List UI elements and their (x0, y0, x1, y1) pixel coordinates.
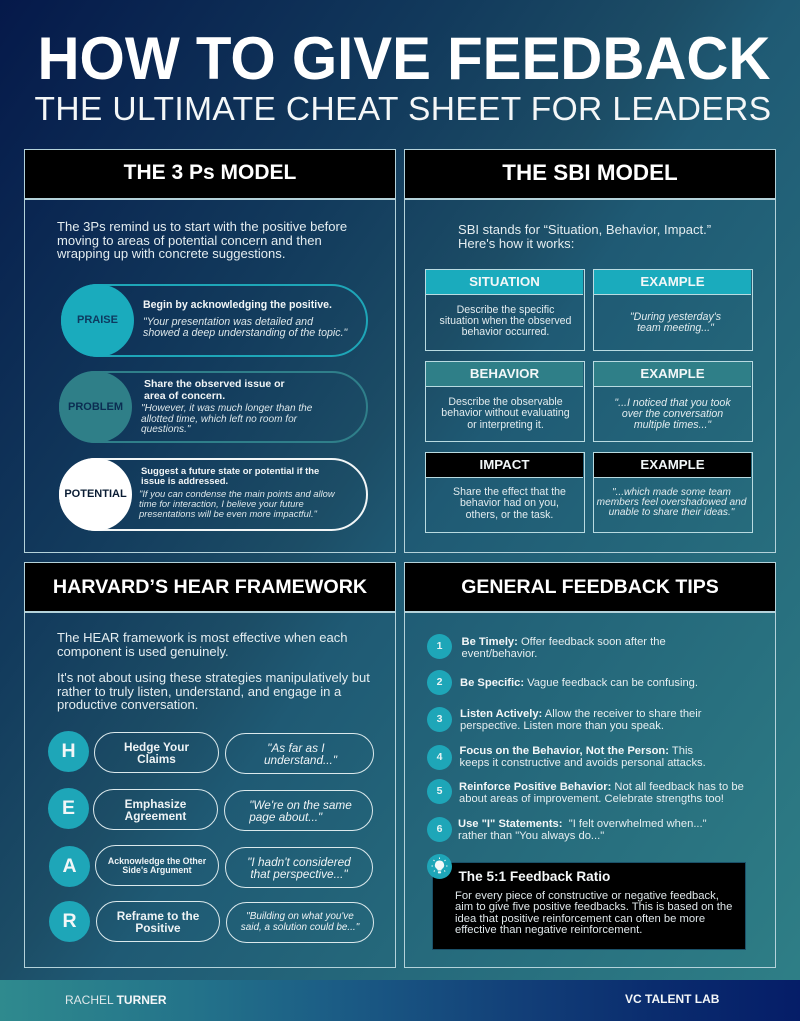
text: HEAR introduction (57, 630, 370, 712)
heading: the SBI model: THE SBI MODEL (502, 160, 678, 185)
panel: the SBI model (404, 149, 776, 553)
footer band (0, 980, 800, 1021)
card: impact: IMPACT (480, 457, 529, 472)
text: potential example (138, 488, 336, 519)
callout: the 5:1 feedback ratio (427, 854, 746, 950)
text: ratio explanation: For every piece of constructive or negative feedback, (455, 890, 719, 902)
text: problem example: "However, it was much longer than the (141, 403, 312, 414)
heading: the 3 Ps model: THE 3 Ps MODEL (124, 161, 296, 184)
number badge 1 (427, 634, 452, 659)
text: listen actively (460, 708, 702, 732)
text: focus on the behavior: Focus on the Behavior, Not the Person: This (460, 745, 693, 757)
number badge 1: 1 (437, 640, 442, 652)
label: reframe to the positive: Positive (135, 920, 181, 934)
text: reinforce positive behavior: Reinforce Positive Behavior: Not all feedback has to be (459, 781, 744, 793)
card: behavior example: EXAMPLE (640, 366, 705, 381)
row: reframe to the positive (49, 901, 374, 943)
label: emphasize agreement: Agreement (125, 808, 186, 822)
text: use I statements (458, 818, 707, 842)
heading: general feedback tips: GENERAL FEEDBACK TIPS (461, 576, 719, 598)
row: praise (61, 284, 368, 357)
quote: reframe example: said, a solution could be..." (241, 922, 359, 932)
quote: emphasize example: page about..." (249, 810, 322, 824)
tip 6 (427, 817, 707, 842)
heading: general feedback tips (404, 562, 776, 613)
text: potential example: presentations will be even more impactful." (139, 508, 317, 519)
card: impact example: EXAMPLE (640, 457, 705, 472)
text: reinforce positive behavior: about areas of improvement. Celebrate strengths too! (459, 793, 724, 805)
text: impact example: members feel overshadowed and (597, 497, 746, 508)
text: SBI introduction: Here's how it works: (458, 236, 574, 250)
heading: the 5:1 feedback ratio: The 5:1 Feedback Ratio (458, 869, 610, 884)
text: impact description: others, or the task. (466, 509, 553, 521)
badge: praise (61, 284, 134, 357)
quote: acknowledge example (225, 847, 373, 888)
text: potential guidance (141, 466, 319, 487)
text: listen actively: perspective. Listen more than you speak. (460, 720, 664, 732)
author name: RACHEL TURNER (65, 993, 167, 1007)
text: behavior description (441, 396, 570, 431)
letter badge: R: R (62, 910, 77, 932)
letter badge: H (48, 731, 89, 772)
text: ratio explanation: aim to give five positive feedbacks. This is based on the (455, 901, 732, 913)
text: behavior example: over the conversation (622, 408, 723, 420)
text: praise example (143, 316, 348, 339)
text: praise example: showed a deep understanding of the topic." (143, 327, 347, 339)
text: potential example: "If you can condense the main points and allow (139, 488, 335, 499)
label: acknowledge the argument: Side's Argument (122, 864, 192, 874)
text: 3Ps introduction: wrapping up with concrete suggestions. (57, 246, 285, 261)
text: be specific: Be Specific: Vague feedback can be confusing. (460, 677, 698, 689)
quote: reframe example (226, 902, 374, 943)
text: problem example (141, 403, 312, 435)
badge: praise: PRAISE (77, 314, 118, 326)
row: potential (59, 458, 368, 531)
tip 5 (427, 779, 744, 805)
letter badge: A: A (62, 855, 77, 877)
quote: acknowledge example: "I hadn't considered (247, 854, 351, 868)
text: behavior description: or interpreting it. (467, 419, 544, 431)
text: praise guidance: Begin by acknowledging the positive. (143, 299, 332, 311)
badge: problem: PROBLEM (68, 401, 123, 413)
quote: reframe example: "Building on what you've (246, 911, 354, 922)
text: impact example: "...which made some team (612, 486, 731, 498)
quote: hedge example (225, 733, 374, 774)
text: situation example (630, 311, 721, 334)
text: problem example: questions." (141, 424, 190, 435)
text: HEAR introduction: The HEAR framework is most effective when each (57, 630, 348, 645)
text: focus on the behavior (460, 745, 706, 769)
card: situation (425, 269, 585, 351)
text: focus on the behavior: keeps it constructive and avoids personal attacks. (460, 757, 706, 769)
text: be timely (462, 636, 666, 660)
text: HEAR introduction: productive conversation. (57, 697, 198, 712)
quote: hedge example: "As far as I (267, 740, 325, 754)
text: reinforce positive behavior (459, 781, 744, 805)
text: situation description: situation when the observed (440, 315, 571, 327)
card: situation: SITUATION (469, 274, 540, 289)
quote: acknowledge example: that perspective..." (250, 866, 348, 880)
badge: potential (59, 458, 132, 531)
letter badge: H: H (61, 740, 76, 762)
text: HEAR introduction: component is used genuinely. (57, 644, 229, 658)
text: problem guidance: Share the observed issue or (144, 378, 285, 390)
text: problem guidance: area of concern. (144, 390, 225, 402)
text: situation description (440, 304, 571, 338)
label: acknowledge the argument: Acknowledge the Other (108, 856, 206, 866)
label: emphasize agreement (93, 789, 218, 830)
row: emphasize agreement (48, 788, 373, 831)
text: potential example: time for interaction, I believe your future (139, 498, 304, 509)
text: SBI introduction (458, 222, 711, 250)
card: situation example: EXAMPLE (640, 274, 705, 289)
text: ratio explanation: idea that positive reinforcement can often be more (455, 913, 705, 925)
label: reframe to the positive (96, 901, 220, 942)
text: listen actively: Listen Actively: Allow the receiver to share their (460, 708, 701, 720)
number badge 4 (427, 745, 452, 770)
row: hedge your claims (48, 731, 374, 774)
tip 4 (427, 745, 706, 770)
text: situation description: Describe the specific (457, 304, 554, 316)
label: hedge your claims: Hedge Your (124, 740, 189, 754)
text: impact description (453, 486, 566, 521)
brand name: VC TALENT LAB (625, 992, 719, 1006)
panel: general feedback tips (404, 562, 776, 968)
number badge 6: 6 (437, 823, 442, 835)
text: behavior example: "...I noticed that you took (614, 396, 731, 408)
number badge 4: 4 (437, 751, 442, 763)
panel: the 3 Ps model (24, 149, 396, 553)
text: HEAR introduction: It's not about using these strategies manipulatively but (57, 670, 370, 685)
text: situation example: "During yesterday's (630, 311, 721, 323)
text: HEAR introduction: rather to truly listen, understand, and engage in a (57, 684, 341, 698)
tip 1 (427, 634, 666, 660)
number badge 6 (427, 817, 452, 842)
text: SBI introduction: SBI stands for “Situation, Behavior, Impact.” (458, 222, 711, 237)
label: reframe to the positive: Reframe to the (117, 908, 199, 922)
letter badge: R (49, 901, 90, 942)
card: impact example (593, 452, 753, 533)
text: impact description: behavior had on you, (460, 497, 559, 509)
badge: problem (59, 371, 132, 443)
text: use I statements: rather than "You always do..." (458, 830, 604, 842)
tip 2 (427, 670, 698, 695)
text: problem guidance (144, 378, 285, 402)
text: be timely: event/behavior. (462, 648, 537, 660)
number badge 3: 3 (437, 713, 442, 725)
heading: Harvard's HEAR framework (24, 562, 396, 613)
label: hedge your claims: Claims (137, 752, 176, 766)
panel: Harvard's HEAR framework (24, 562, 396, 968)
text: praise example: "Your presentation was detailed and (143, 316, 313, 328)
letter badge: E (48, 788, 89, 829)
text: 3Ps introduction: moving to areas of potential concern and then (57, 232, 322, 248)
letter badge: E: E (62, 797, 75, 819)
card: behavior (425, 361, 585, 442)
text: situation example: team meeting..." (637, 322, 714, 334)
row: problem (59, 371, 368, 443)
number badge 5 (427, 779, 452, 804)
card: impact (425, 452, 585, 533)
text: 3Ps introduction (57, 219, 347, 261)
text: behavior description: behavior without evaluating (441, 407, 570, 419)
number badge 2: 2 (437, 676, 442, 688)
card: behavior example (593, 361, 753, 442)
tip 3 (427, 707, 702, 732)
label: emphasize agreement: Emphasize (125, 796, 186, 810)
text: behavior example: multiple times..." (634, 419, 711, 431)
icon: light bulb (427, 854, 452, 879)
number badge 3 (427, 707, 452, 732)
text: ratio explanation (455, 890, 732, 936)
label: acknowledge the argument (95, 845, 219, 886)
text: use I statements: Use "I" Statements: "I felt overwhelmed when..." (458, 818, 707, 830)
card: behavior: BEHAVIOR (470, 366, 539, 381)
quote: emphasize example: "We're on the same (249, 798, 352, 812)
row: acknowledge the argument (49, 845, 373, 888)
number badge 2 (427, 670, 452, 695)
heading: the 3 Ps model (24, 149, 396, 200)
number badge 5: 5 (437, 785, 442, 797)
text: situation description: behavior occurred. (462, 326, 549, 338)
text: problem example: allotted time, which left no room for (141, 414, 297, 424)
heading: Harvard's HEAR framework: HARVARD’S HEAR FRAMEWORK (53, 576, 367, 598)
card: situation example (593, 269, 753, 351)
subtitle: THE ULTIMATE CHEAT SHEET FOR LEADERS (35, 91, 771, 128)
title: HOW TO GIVE FEEDBACK (37, 25, 770, 92)
label: hedge your claims (94, 732, 219, 773)
text: potential guidance: Suggest a future state or potential if the (141, 466, 319, 477)
text: potential guidance: issue is addressed. (141, 476, 228, 487)
text: impact example (596, 486, 747, 518)
badge: potential: POTENTIAL (64, 488, 127, 500)
text: behavior description: Describe the observable (448, 396, 563, 408)
text: impact description: Share the effect that the (453, 486, 566, 498)
text: impact example: unable to share their ideas." (609, 507, 734, 518)
text: be timely: Be Timely: Offer feedback soon after the (462, 636, 666, 648)
text: ratio explanation: effective than negative reinforcement. (455, 924, 642, 936)
heading: the SBI model (404, 149, 776, 200)
quote: emphasize example (224, 790, 373, 831)
letter badge: A (49, 846, 90, 887)
quote: hedge example: understand..." (264, 752, 337, 766)
text: behavior example (614, 396, 731, 431)
text: 3Ps introduction: The 3Ps remind us to start with the positive before (57, 219, 347, 234)
